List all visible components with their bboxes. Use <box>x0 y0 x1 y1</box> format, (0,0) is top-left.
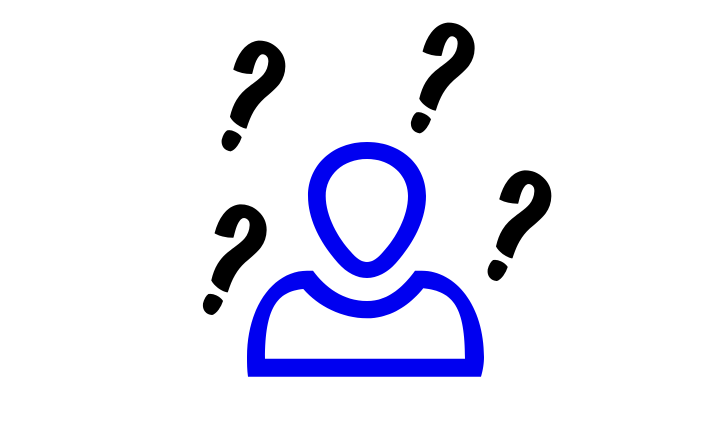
icon: question mark right <box>488 171 551 280</box>
icon: person head outline <box>308 142 426 278</box>
icon: person shoulders outline <box>247 271 484 377</box>
icon: question mark top left <box>222 41 285 151</box>
icon: question mark top right <box>412 23 474 133</box>
icon: question mark lower left <box>204 205 266 314</box>
